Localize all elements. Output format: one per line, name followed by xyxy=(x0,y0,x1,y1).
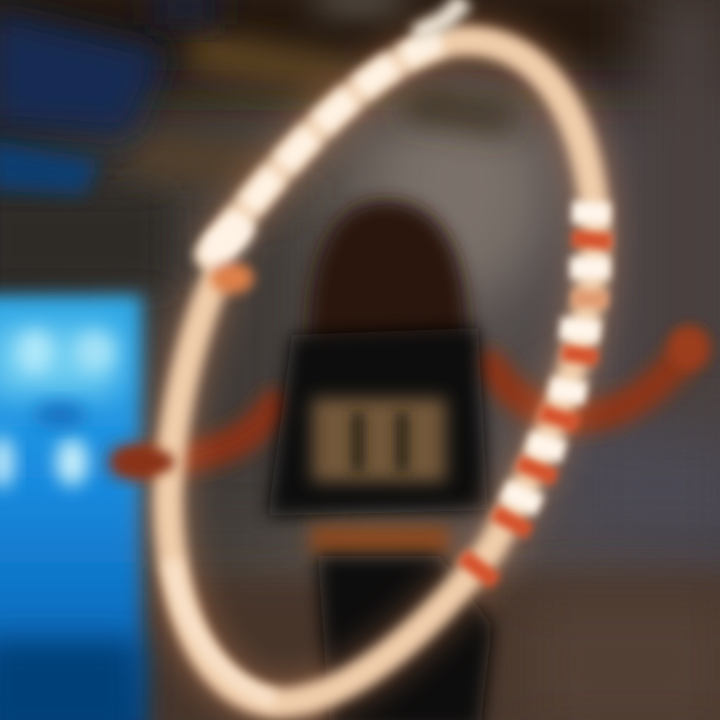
shirt xyxy=(268,328,488,516)
left arm xyxy=(125,405,275,462)
ceiling beams xyxy=(135,0,520,185)
hoop white bands xyxy=(504,212,610,506)
floor xyxy=(150,575,720,720)
hoop red stripes xyxy=(462,238,612,582)
blue screen left xyxy=(0,295,142,720)
hair xyxy=(308,200,468,370)
hoop tube xyxy=(168,41,595,703)
blue shapes top left xyxy=(0,0,220,195)
hands xyxy=(115,326,708,476)
right arm xyxy=(490,348,692,417)
hoop lower-left highlight xyxy=(172,560,275,700)
performer xyxy=(125,200,692,720)
hoop highlight top xyxy=(215,40,440,250)
hoop xyxy=(168,0,612,703)
hoop top attachment xyxy=(415,0,465,35)
waist xyxy=(310,526,450,554)
shirt print xyxy=(312,398,446,482)
hoop glow xyxy=(168,41,595,703)
hoop joint xyxy=(191,211,261,294)
legs xyxy=(318,556,492,720)
